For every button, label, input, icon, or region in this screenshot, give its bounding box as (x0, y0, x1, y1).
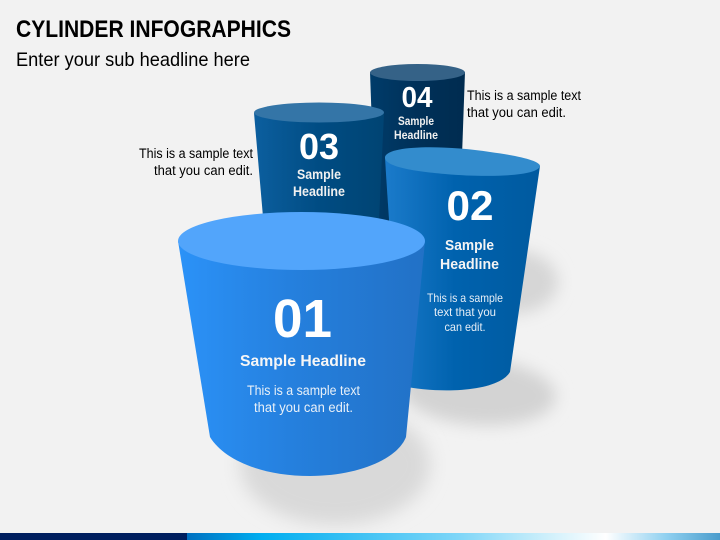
cylinder 02 headline: Sample (445, 237, 494, 254)
drop shadows (240, 250, 558, 525)
cylinder 04 top (370, 64, 465, 81)
cylinder 01 body text: that you can edit. (254, 400, 353, 415)
callout: left text (139, 146, 253, 178)
cylinder 04 number: 04 (402, 82, 432, 114)
cylinder 01 headline: Sample Headline (240, 353, 366, 370)
callout: right text: that you can edit. (467, 105, 566, 120)
cylinder 02 headline (440, 237, 499, 273)
cylinder 02 body text (427, 291, 503, 334)
callout: left text: that you can edit. (154, 163, 253, 178)
cylinder 02 body text: can edit. (444, 320, 486, 334)
cylinder 02 (385, 147, 540, 390)
cylinder 04 headline (394, 114, 438, 142)
callout: left text: This is a sample text (139, 146, 253, 161)
cylinder 04 headline: Headline (394, 128, 438, 142)
cylinder 03 headline: Headline (293, 184, 345, 199)
cylinder 01 number: 01 (273, 289, 332, 349)
footer bar (0, 533, 720, 540)
cylinder 02 body text: This is a sample (427, 291, 503, 305)
cylinder 03 headline: Sample (297, 167, 341, 182)
cylinder 02 body text: text that you (434, 305, 496, 319)
cylinder 03 number: 03 (299, 126, 339, 167)
title: CYLINDER INFOGRAPHICS (16, 16, 291, 43)
callout: right text (467, 88, 581, 120)
cylinder 01 body text (247, 383, 360, 415)
cylinder 03 (254, 102, 384, 240)
cylinder 03 headline (293, 167, 345, 199)
cylinder 02 top (385, 147, 540, 176)
cylinder 02 number: 02 (446, 182, 494, 229)
cylinder 01 top (178, 212, 425, 270)
cylinder 03 top (254, 102, 384, 122)
cylinder 04 (370, 64, 465, 240)
cylinder 01 (178, 212, 425, 476)
cylinder 04 headline: Sample (398, 114, 434, 128)
cylinder 02 headline: Headline (440, 256, 499, 273)
callout: right text: This is a sample text (467, 88, 581, 103)
subtitle: Enter your sub headline here (16, 49, 250, 71)
cylinder 01 body text: This is a sample text (247, 383, 360, 398)
